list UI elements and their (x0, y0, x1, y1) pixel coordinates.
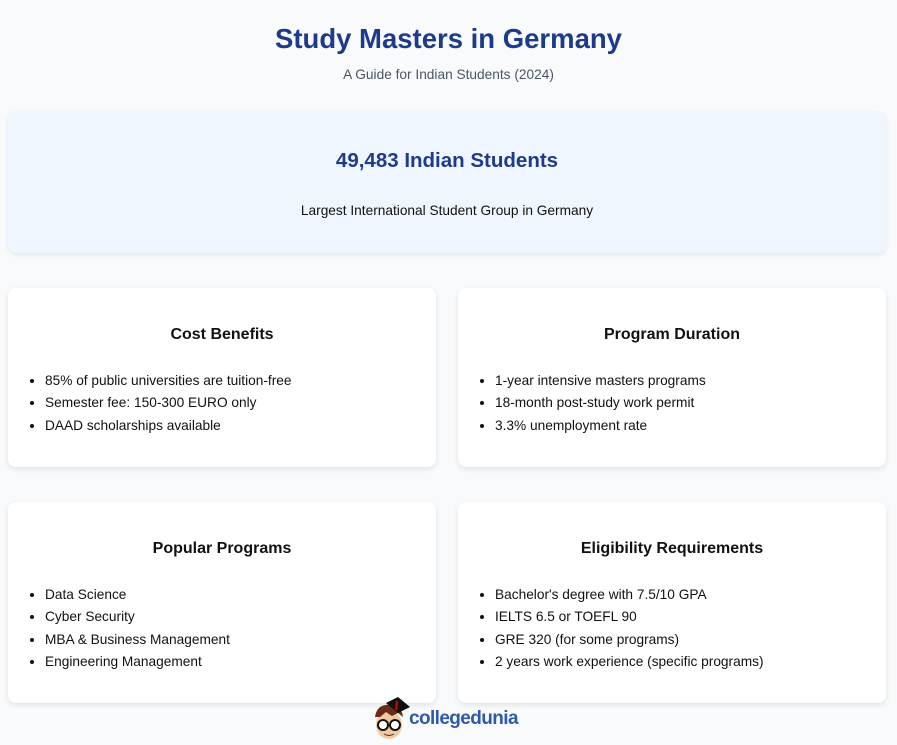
logo: collegedunia (375, 697, 519, 739)
list: MBA & Business Management (45, 632, 230, 647)
list (480, 587, 764, 669)
list: 1-year intensive masters programs (495, 373, 706, 388)
list: Semester fee: 150-300 EURO only (45, 395, 257, 410)
icon: mascot (375, 697, 410, 739)
list: 85% of public universities are tuition-free (45, 373, 292, 388)
subtitle: A Guide for Indian Students (2024) (343, 67, 554, 82)
list (30, 373, 292, 433)
stat number: 49,483 Indian Students (336, 149, 558, 172)
list: GRE 320 (for some programs) (495, 632, 679, 647)
list: DAAD scholarships available (45, 418, 221, 433)
panel: eligibility (458, 502, 886, 703)
list: Cyber Security (45, 609, 135, 624)
list: Bachelor's degree with 7.5/10 GPA (495, 587, 707, 602)
list: Engineering Management (45, 654, 202, 669)
heading: Eligibility Requirements (581, 540, 763, 557)
list: 3.3% unemployment rate (495, 418, 647, 433)
heading: Cost Benefits (170, 326, 274, 343)
list: 18-month post-study work permit (495, 395, 694, 410)
list: 2 years work experience (specific programs) (495, 654, 764, 669)
list (480, 373, 706, 433)
list: IELTS 6.5 or TOEFL 90 (495, 609, 637, 624)
heading: Popular Programs (153, 540, 291, 557)
list (30, 587, 230, 669)
heading: Program Duration (604, 326, 740, 343)
list: Data Science (45, 587, 126, 602)
panel: cost benefits (8, 288, 436, 467)
panel: popular programs (8, 502, 436, 703)
panel: program duration (458, 288, 886, 467)
wordmark: collegedunia (409, 708, 518, 729)
panel: highlight stat (8, 111, 886, 253)
title: Study Masters in Germany (275, 23, 622, 54)
stat caption: Largest International Student Group in Germany (301, 203, 593, 218)
